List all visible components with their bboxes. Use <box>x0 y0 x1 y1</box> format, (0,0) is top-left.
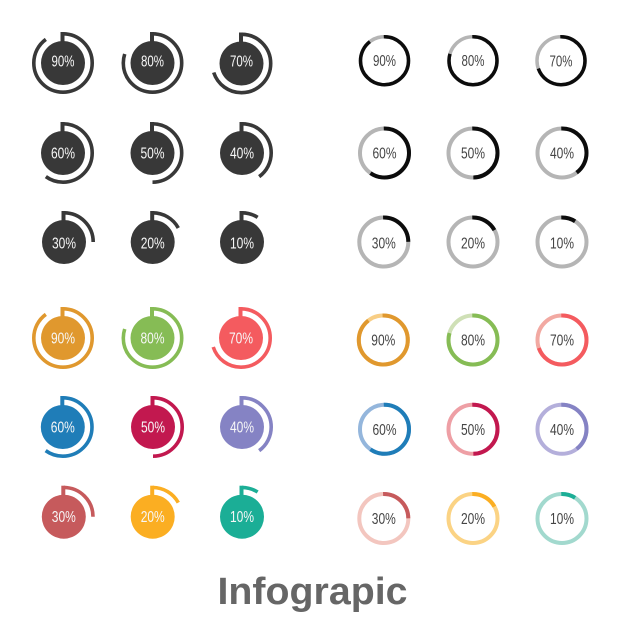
ring: red 70% <box>538 316 586 364</box>
gauge: dark 70% <box>212 32 271 93</box>
gauge: rose 30% <box>35 486 93 546</box>
gauge: dark 90% <box>34 32 92 92</box>
gauge: teal 10%: 10% <box>230 509 254 526</box>
gauge: dark 60%: 60% <box>51 145 75 162</box>
ring: black 80%: 80% <box>462 53 484 70</box>
gauge: purple 40% <box>213 396 271 456</box>
gauge: dark 10%: 10% <box>230 235 254 252</box>
gauge: dark 30%: 30% <box>52 235 76 252</box>
gauge: dark 20% <box>124 211 182 271</box>
panel: coloured disc gauges <box>34 307 271 546</box>
gauge: dark 10% <box>213 211 271 271</box>
gauge: crimson 50%: 50% <box>141 419 165 436</box>
gauge: blue 60%: 60% <box>51 419 75 436</box>
gauge: green 80% <box>123 307 182 367</box>
gauge: dark 70%: 70% <box>230 54 253 70</box>
ring: teal 10% <box>538 494 586 543</box>
gauge: teal 10% <box>213 486 271 546</box>
gauge: dark 40% <box>213 122 271 182</box>
ring: orange 90% <box>359 316 408 364</box>
gauge: dark 20%: 20% <box>141 235 165 252</box>
ring: black 90%: 90% <box>373 53 396 70</box>
ring: black 90% <box>360 37 408 85</box>
gauge: orange 90% <box>34 307 92 367</box>
ring: crimson 50% <box>448 405 498 454</box>
ring: black 60%: 60% <box>372 146 396 162</box>
gauge: yellow 20% <box>124 486 182 546</box>
gauge: crimson 50% <box>124 396 182 456</box>
gauge: red 70%: 70% <box>229 330 253 347</box>
gauge: dark 60% <box>34 122 92 182</box>
ring: black 60% <box>360 128 409 178</box>
panel: dark disc gauges <box>34 32 271 271</box>
ring: yellow 20% <box>448 494 498 543</box>
ring: black 50%: 50% <box>461 146 485 162</box>
ring: black 20% <box>448 218 498 266</box>
ring: black 30% <box>359 218 408 266</box>
gauge: dark 90%: 90% <box>52 53 74 70</box>
gauge: dark 80% <box>123 32 182 92</box>
ring: black 80% <box>449 37 497 85</box>
ring: crimson 50%: 50% <box>461 422 485 439</box>
title: Infograpic <box>218 571 408 613</box>
gauge: dark 30% <box>35 211 93 271</box>
ring: teal 10%: 10% <box>550 511 574 528</box>
panel: grey and black rings <box>359 37 586 267</box>
ring: red 70%: 70% <box>550 332 574 350</box>
ring: blue 60% <box>360 405 409 454</box>
gauge: purple 40%: 40% <box>230 419 254 436</box>
ring: black 40%: 40% <box>550 146 574 162</box>
ring: black 10% <box>538 218 586 266</box>
ring: black 70% <box>537 37 585 85</box>
ring: black 70%: 70% <box>550 54 572 71</box>
ring: purple 40%: 40% <box>550 422 574 439</box>
ring: orange 90%: 90% <box>371 332 395 350</box>
ring: purple 40% <box>538 405 586 454</box>
ring: black 10%: 10% <box>550 235 574 252</box>
gauge: orange 90%: 90% <box>51 330 75 347</box>
ring: green 80%: 80% <box>461 332 485 350</box>
gauge: dark 80%: 80% <box>141 53 164 70</box>
gauge: green 80%: 80% <box>140 330 164 347</box>
ring: green 80% <box>448 316 498 364</box>
gauge: blue 60% <box>34 396 92 456</box>
ring: black 50% <box>448 128 498 178</box>
ring: black 30%: 30% <box>372 235 396 252</box>
ring: black 20%: 20% <box>461 235 485 252</box>
ring: blue 60%: 60% <box>372 422 396 439</box>
ring: yellow 20%: 20% <box>461 511 485 528</box>
gauge: dark 50% <box>123 122 182 182</box>
gauge: yellow 20%: 20% <box>141 509 165 526</box>
gauge: red 70% <box>212 307 270 367</box>
ring: rose 30% <box>359 494 408 543</box>
gauge: dark 50%: 50% <box>140 145 164 162</box>
ring: rose 30%: 30% <box>372 511 396 528</box>
gauge: dark 40%: 40% <box>230 145 254 162</box>
gauge: rose 30%: 30% <box>52 509 76 526</box>
ring: black 40% <box>538 128 586 178</box>
panel: coloured rings <box>359 316 586 543</box>
